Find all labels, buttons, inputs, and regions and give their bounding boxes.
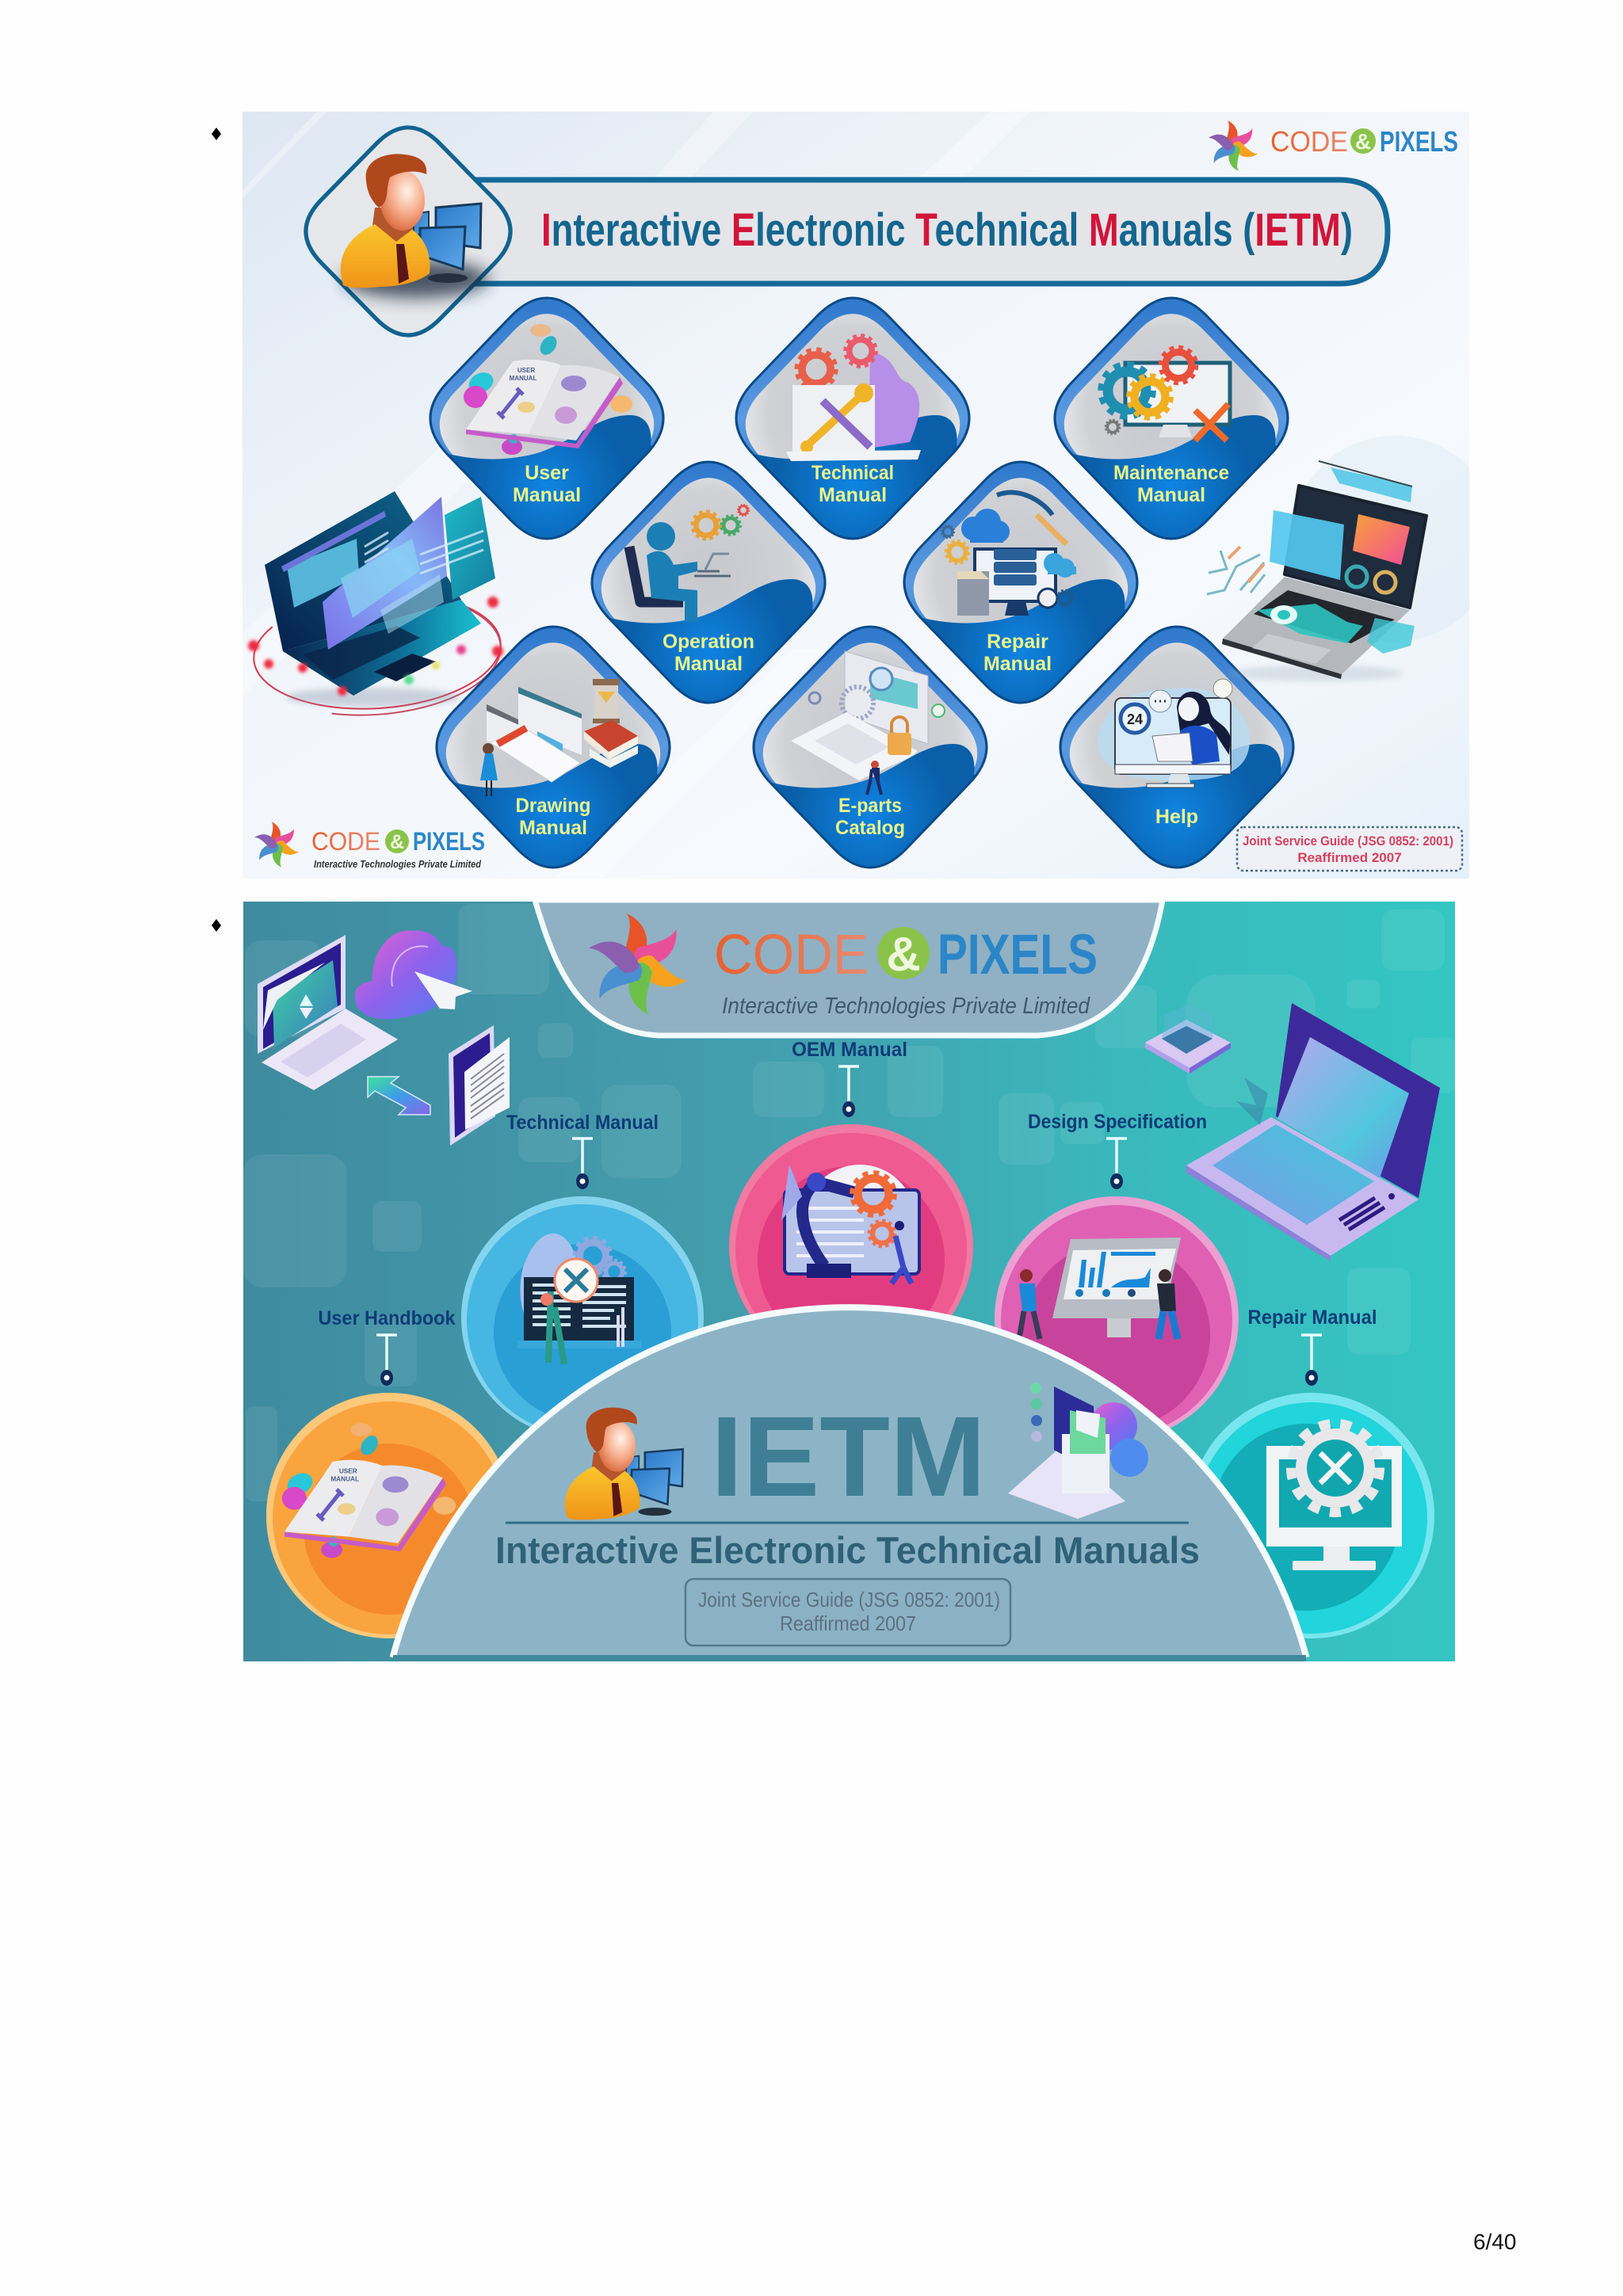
callout: standard reference: [1237, 827, 1462, 871]
icon: open user manual book: [282, 1423, 456, 1558]
label: User Handbook: [319, 1307, 456, 1386]
icon: cloud servers and tools: [941, 493, 1076, 616]
icon: robot arm and monitor: [781, 1165, 919, 1283]
logo bottom left: PIXELS: [413, 827, 485, 856]
logo wordmark: PIXELS: [938, 924, 1098, 986]
icon: laptop with cloud storage: [1008, 1383, 1148, 1519]
illustration: large laptop: [1186, 1003, 1440, 1261]
icon: code monitor with tools badge: [517, 1234, 642, 1364]
panel: User Manual: [429, 296, 665, 540]
logo wordmark: CODE: [714, 924, 869, 986]
callout: standard reference: Joint Service Guide (JSG 0852: 2001): [1243, 833, 1453, 849]
label: Repair Manual: Repair Manual: [1247, 1306, 1377, 1329]
panel: Help: [1018, 627, 1335, 906]
panel: Repair Manual: [903, 461, 1139, 704]
logo wordmark: [714, 924, 1098, 1019]
icon: support agent on monitor: 24: [1127, 711, 1143, 727]
label: Manual: [519, 817, 587, 839]
illustration: cloud and paper plane: [355, 930, 472, 1019]
icon: open book: [464, 324, 632, 455]
icon: presentation monitor with two people: [1019, 1238, 1181, 1339]
panel: company logo header: [535, 900, 1163, 1035]
icon: seated person with laptop and gears: [629, 505, 749, 622]
panel: Drawing Manual: [435, 626, 671, 868]
bullet marker first image: [212, 128, 221, 140]
panel: Design Specification circle: [995, 1196, 1239, 1440]
label: Manual: [513, 484, 581, 506]
label: Help: [1155, 806, 1198, 828]
label: OEM Manual: OEM Manual: [792, 1039, 907, 1061]
label: User Handbook: User Handbook: [319, 1307, 456, 1329]
icon: drawing screens keyboard hourglass books: [480, 679, 638, 796]
label: Drawing: [515, 795, 591, 817]
panel: Repair Manual circle: [1189, 1393, 1434, 1638]
icon: monitor with gear and tools: [1266, 1424, 1402, 1570]
label: OEM Manual: [792, 1039, 907, 1117]
panel: User Handbook circle: [266, 1393, 512, 1638]
callout: standard reference: Joint Service Guide (JSG 0852: 2001): [698, 1588, 1000, 1611]
label: Design Specification: [1028, 1111, 1207, 1189]
divider: [506, 1521, 1189, 1524]
label: Technical Manual: [506, 1112, 659, 1189]
subtitle: Interactive Electronic Technical Manuals: [495, 1529, 1200, 1571]
panel: Operation Manual: [590, 461, 827, 704]
label: Manual: [983, 653, 1052, 675]
panel: Technical Manual circle: [461, 1196, 704, 1439]
label: E-parts: [838, 795, 902, 817]
panel: E-parts Catalog: [712, 627, 1029, 906]
illustration: laptop with floating screens and red orbit: [243, 491, 505, 723]
icon: gears wrench and purple cloud: [786, 336, 921, 461]
illustration: phone with document: [449, 1025, 510, 1146]
icon: open user manual book: MANUAL: [330, 1476, 359, 1483]
bullet marker second image: [212, 919, 221, 932]
icon: secure laptop with fingerprint and lock: [791, 651, 945, 795]
logo bottom left: Interactive Technologies Private Limited: [314, 858, 482, 870]
title text: Interactive Electronic Technical Manuals (IETM): [541, 204, 1353, 256]
label: Design Specification: Design Specification: [1028, 1111, 1207, 1133]
logo bottom left: &: [390, 831, 404, 853]
panel: Technical Manual: [735, 296, 971, 540]
icon: open book: USER: [517, 367, 535, 374]
callout: standard reference: Reaffirmed 2007: [780, 1611, 916, 1635]
panel: central IETM dome: [393, 1307, 1306, 1661]
icon: person with computers: [565, 1408, 683, 1520]
callout: standard reference: Reaffirmed 2007: [1297, 850, 1402, 865]
logo top right: PIXELS: [1380, 125, 1458, 158]
icon: person with computers in diamond: [306, 128, 510, 335]
page number: 6/40: [1473, 2229, 1517, 2254]
illustration: small isometric chip: [1145, 1005, 1231, 1074]
heading banner: [460, 180, 1388, 284]
arrow: two-way exchange: [368, 1077, 430, 1115]
icon: monitor with gears and tools: [1102, 348, 1230, 441]
icon: open user manual book: USER: [339, 1467, 357, 1474]
logo wordmark: Interactive Technologies Private Limited: [722, 994, 1090, 1019]
icon: support agent on monitor: [1098, 679, 1250, 788]
label: Technical: [812, 462, 894, 484]
panel: OEM Manual circle: [729, 1124, 973, 1368]
icon: pinwheel logo: [587, 913, 689, 1015]
logo top right: &: [1355, 129, 1371, 154]
panel: IETM manuals overview: [242, 112, 1498, 906]
label: Maintenance: [1113, 462, 1229, 484]
callout: standard reference: [685, 1579, 1010, 1646]
logo bottom left: CODE: [311, 827, 380, 856]
logo bottom left: [254, 822, 485, 870]
illustration: laptop with folder: [258, 935, 398, 1090]
label: Repair Manual: [1247, 1306, 1377, 1386]
icon: open book: MANUAL: [510, 375, 537, 382]
label: Operation: [663, 631, 754, 653]
logo top right: [1208, 120, 1458, 171]
label: Manual: [819, 484, 887, 506]
logo wordmark: &: [886, 928, 921, 981]
heading: IETM: IETM: [711, 1393, 986, 1520]
label: Manual: [1137, 484, 1205, 506]
panel: Maintenance Manual: [1053, 296, 1289, 540]
label: Repair: [987, 631, 1048, 653]
label: Technical Manual: Technical Manual: [506, 1112, 659, 1134]
illustration: laptop with dashboards: [1207, 461, 1426, 681]
label: Manual: [674, 653, 743, 675]
logo top right: CODE: [1270, 125, 1348, 158]
label: User: [525, 462, 569, 484]
panel: IETM document sources: [243, 900, 1455, 1661]
label: Catalog: [835, 817, 905, 839]
